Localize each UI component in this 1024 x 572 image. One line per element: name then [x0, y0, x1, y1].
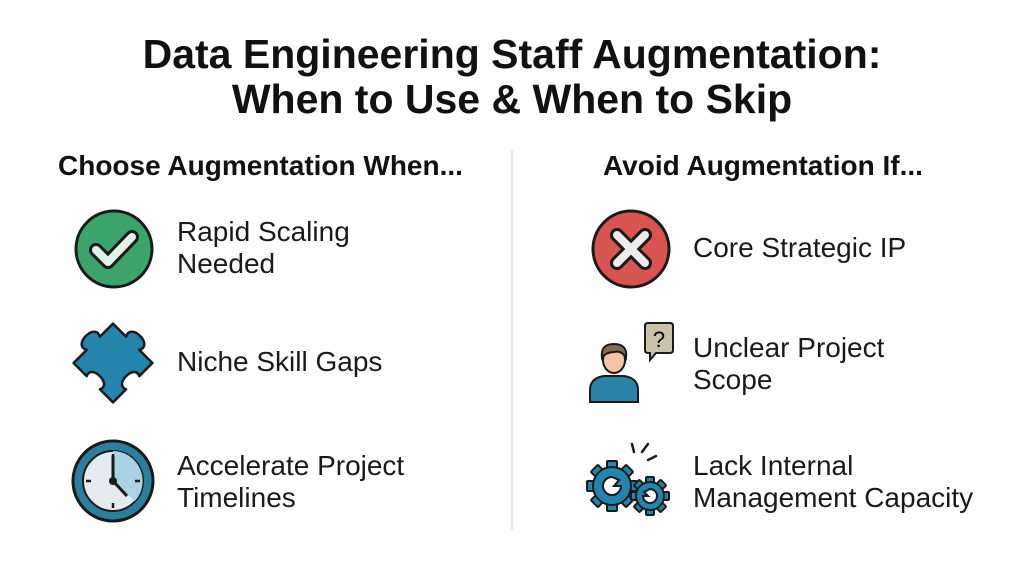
title: Data Engineering Staff Augmentation:	[143, 31, 881, 77]
text: niche skill gaps: Niche Skill Gaps	[177, 346, 382, 377]
text: accelerate: Accelerate Project	[177, 450, 404, 481]
heading: avoid: Avoid Augmentation If...	[603, 150, 923, 181]
text: core strategic: Core Strategic IP	[693, 232, 906, 263]
icon: x	[592, 210, 670, 288]
text: rapid scaling: Needed	[177, 248, 275, 279]
icon: check	[74, 210, 154, 288]
icon: clock	[72, 440, 154, 522]
text: unclear scope: Unclear Project	[693, 332, 884, 363]
text: lack capacity	[693, 450, 973, 513]
title	[143, 31, 881, 122]
icon: broken gears	[586, 442, 670, 516]
text: lack capacity: Management Capacity	[693, 482, 973, 513]
icon: person question	[589, 322, 674, 403]
text: lack capacity: Lack Internal	[693, 450, 853, 481]
text: unclear scope: Scope	[693, 364, 772, 395]
icon: person question: ?	[653, 327, 665, 352]
text: rapid scaling: Rapid Scaling	[177, 216, 350, 247]
icon: puzzle	[72, 322, 154, 404]
text: accelerate	[177, 450, 404, 513]
heading: choose: Choose Augmentation When...	[58, 150, 463, 181]
text: unclear scope	[693, 332, 884, 395]
title: When to Use & When to Skip	[232, 76, 792, 122]
text: accelerate: Timelines	[177, 482, 296, 513]
text: rapid scaling	[177, 216, 350, 279]
